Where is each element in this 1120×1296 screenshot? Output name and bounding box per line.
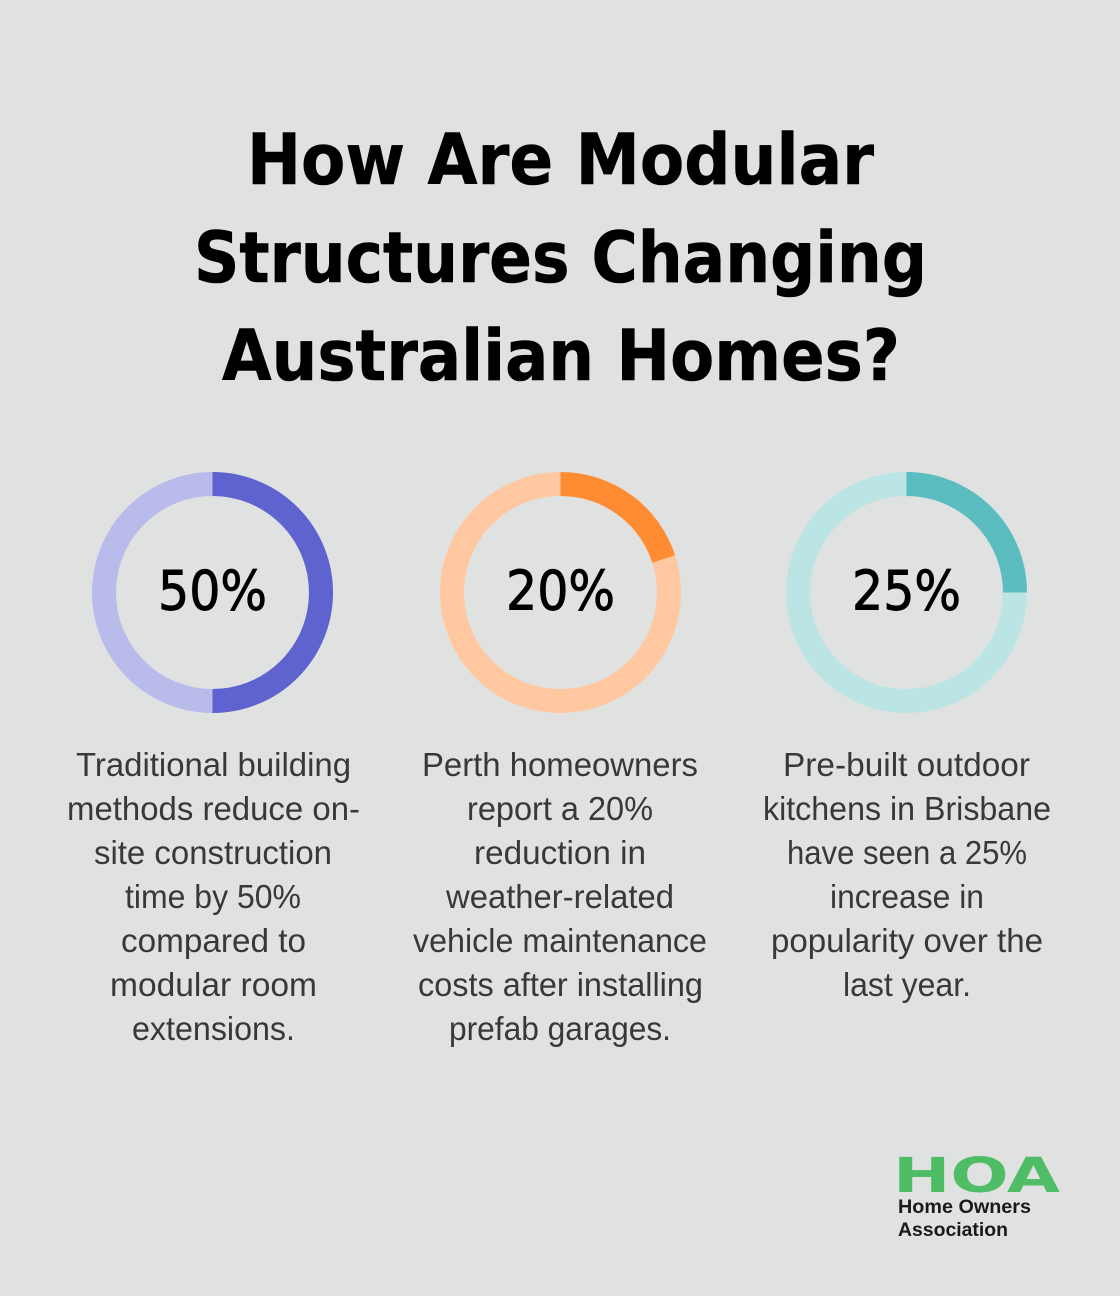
logo: HOA Home Owners Association: Association [898, 1219, 1008, 1241]
text block: pre-built outdoor kitchens: have seen a 25% [787, 834, 1027, 871]
title: Structures Changing [194, 217, 927, 299]
logo: HOA Home Owners Association: Home Owners [898, 1196, 1031, 1218]
title [194, 119, 927, 397]
donut chart: 20%: 20% [506, 560, 615, 622]
text block: traditional building: extensions. [132, 1010, 295, 1047]
logo: HOA Home Owners Association [893, 1148, 1060, 1241]
text block: pre-built outdoor kitchens: kitchens in Brisbane [763, 790, 1051, 827]
donut chart: 50% [104, 484, 321, 701]
text block: perth homeowners: weather-related [445, 878, 674, 915]
text block: traditional building [67, 746, 360, 1047]
title: Australian Homes? [222, 315, 900, 397]
text block: perth homeowners: prefab garages. [449, 1010, 671, 1047]
text block: pre-built outdoor kitchens: popularity over the [771, 922, 1043, 959]
panel: 20% stat [413, 484, 707, 1047]
panel: 50% stat [67, 484, 360, 1047]
text block: perth homeowners: costs after installing [418, 966, 703, 1003]
text block: traditional building: time by 50% [125, 878, 301, 915]
text block: perth homeowners: vehicle maintenance [413, 922, 707, 959]
text block: traditional building: modular room [110, 966, 317, 1003]
text block: traditional building: compared to [121, 922, 306, 959]
donut chart: 50%: 50% [158, 560, 267, 622]
title: How Are Modular [247, 119, 874, 201]
text block: perth homeowners: Perth homeowners [422, 746, 698, 783]
text block: pre-built outdoor kitchens: increase in [830, 878, 984, 915]
donut chart: 25% [798, 484, 1015, 701]
text block: pre-built outdoor kitchens: last year. [843, 966, 971, 1003]
text block: pre-built outdoor kitchens [763, 746, 1051, 1003]
text block: traditional building: site construction [94, 834, 332, 871]
donut chart: 25%: 25% [852, 560, 961, 622]
text block: traditional building: methods reduce on- [67, 790, 360, 827]
text block: perth homeowners: reduction in [474, 834, 646, 871]
text block: traditional building: Traditional building [76, 746, 351, 783]
text block: perth homeowners [413, 746, 707, 1047]
donut chart: 20% [452, 484, 669, 701]
panel: 25% stat [763, 484, 1051, 1003]
text block: perth homeowners: report a 20% [467, 790, 653, 827]
text block: pre-built outdoor kitchens: Pre-built outdoor [783, 746, 1030, 783]
logo: HOA Home Owners Association: HOA [893, 1148, 1060, 1204]
